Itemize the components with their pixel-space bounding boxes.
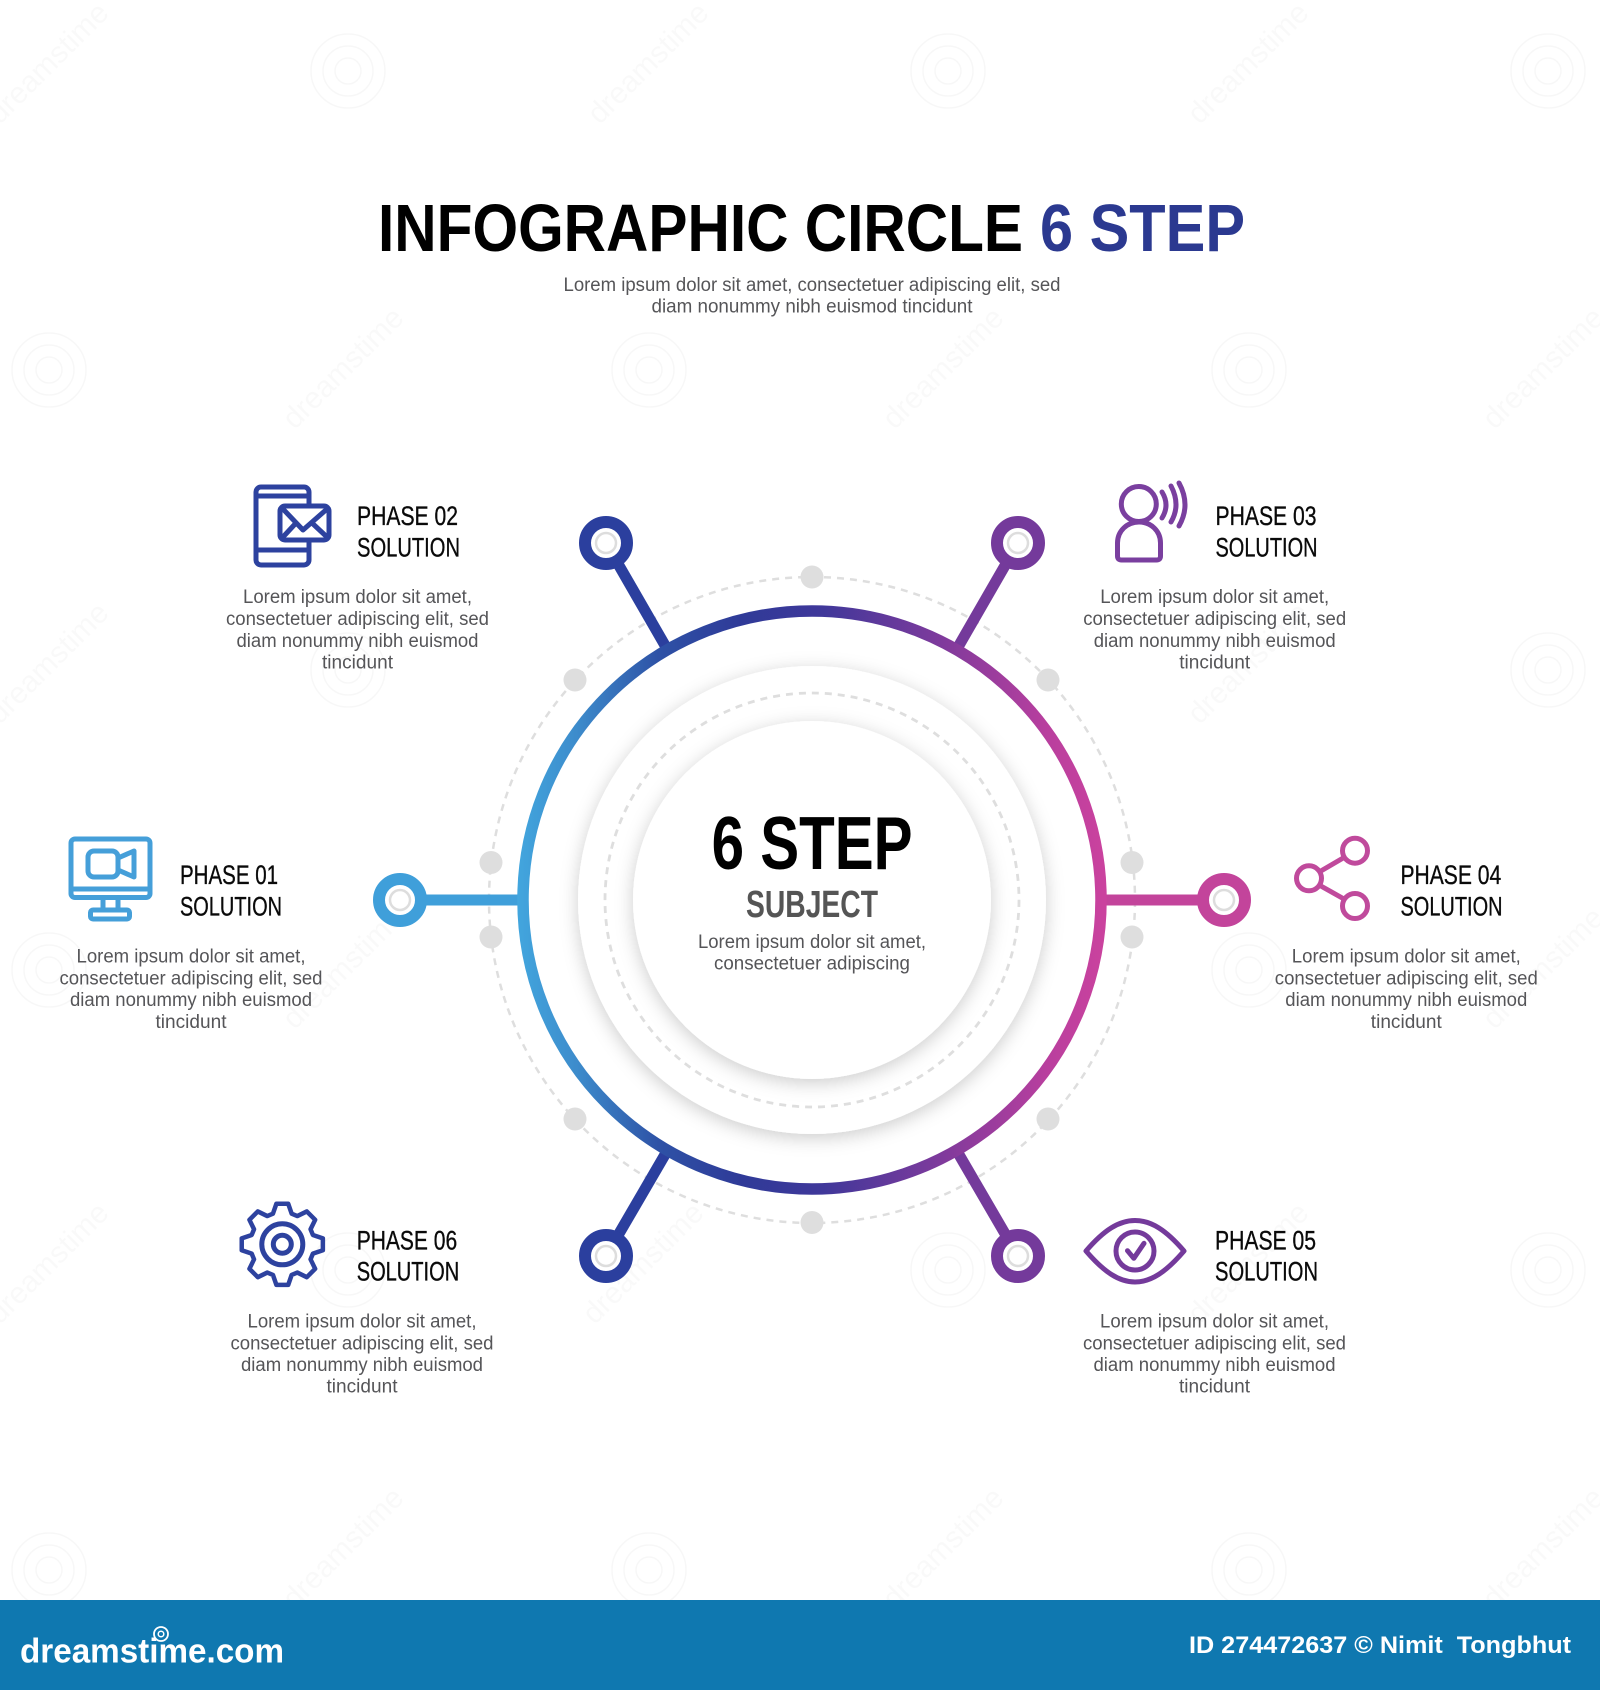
text: phase 03: [1083, 587, 1346, 674]
heading: phase 04: [1400, 860, 1502, 922]
connector node: phase 01: [379, 879, 523, 921]
footer credit: ID 274472637 © Nimit Tongbhut: [1189, 1632, 1571, 1659]
subtitle text: diam nonummy nibh euismod tincidunt: [652, 296, 973, 318]
heading: phase 05: SOLUTION: [1215, 1257, 1318, 1287]
text: phase 06: diam nonummy nibh euismod: [241, 1355, 483, 1376]
text: phase 05: diam nonummy nibh euismod: [1094, 1355, 1336, 1376]
heading: phase 05: PHASE 05: [1215, 1225, 1316, 1255]
footer banner: [0, 1600, 1600, 1690]
text: dreamstime: [876, 901, 1010, 1035]
text: dreamstime: [276, 1481, 410, 1615]
connector node: phase 03: [956, 522, 1039, 650]
text: phase 06: [230, 1312, 494, 1398]
text: phase 05: tincidunt: [1179, 1377, 1251, 1398]
title: 6 STEP: [1040, 191, 1245, 266]
center text: consectetuer adipiscing: [714, 954, 910, 974]
heading: phase 06: SOLUTION: [357, 1257, 459, 1287]
panel: phase 05: [1083, 1220, 1346, 1398]
heading: phase 03: SOLUTION: [1216, 532, 1318, 562]
text: phase 05: [1083, 1312, 1346, 1398]
icon: eye with check: [1086, 1220, 1184, 1282]
text: phase 05: Lorem ipsum dolor sit amet,: [1100, 1312, 1329, 1333]
text: phase 06: Lorem ipsum dolor sit amet,: [248, 1312, 476, 1333]
heading: phase 01: PHASE 01: [180, 860, 278, 890]
heading: phase 02: [357, 501, 460, 562]
text: phase 03: diam nonummy nibh euismod: [1094, 631, 1336, 652]
heading: phase 05: [1215, 1225, 1318, 1287]
icon: video monitor: [71, 839, 150, 919]
text: phase 04: tincidunt: [1371, 1012, 1443, 1033]
inner dashed ring: [605, 693, 1019, 1107]
heading: phase 02: PHASE 02: [357, 501, 458, 531]
panel: phase 06: [230, 1204, 494, 1398]
icon: gear: [242, 1204, 323, 1285]
connector node: phase 06: [585, 1150, 668, 1277]
text: phase 01: tincidunt: [156, 1012, 227, 1033]
center text: 6 STEP: [712, 801, 913, 885]
inner shadow disc: [633, 721, 991, 1079]
gradient main ring: [523, 611, 1101, 1189]
text: dreamstime: [1181, 1196, 1315, 1330]
text: dreamstime: [276, 901, 410, 1035]
text: phase 04: Lorem ipsum dolor sit amet,: [1292, 946, 1521, 968]
text: dreamstime: [1181, 596, 1315, 730]
text: phase 03: consectetuer adipiscing elit, sed: [1083, 609, 1346, 630]
icon: phone with envelope: [256, 487, 329, 565]
subtitle text: [564, 275, 1060, 318]
center text: Lorem ipsum dolor sit amet,: [698, 932, 926, 953]
text: phase 02: consectetuer adipiscing elit, sed: [226, 609, 489, 630]
center text: [698, 801, 926, 974]
outer dashed ring with dots: [480, 566, 1144, 1234]
heading: phase 06: PHASE 06: [357, 1225, 457, 1255]
text: phase 04: diam nonummy nibh euismod: [1285, 990, 1527, 1011]
text: dreamstime: [876, 301, 1010, 435]
text: phase 02: tincidunt: [322, 652, 394, 674]
heading: phase 03: [1216, 501, 1318, 562]
heading: phase 01: SOLUTION: [180, 892, 282, 922]
text: dreamstime: [581, 0, 715, 130]
panel: phase 03: [1083, 483, 1346, 674]
text: phase 01: [60, 946, 322, 1033]
text: phase 01: Lorem ipsum dolor sit amet,: [76, 946, 306, 968]
heading: phase 02: SOLUTION: [357, 532, 460, 562]
text: phase 04: consectetuer adipiscing elit, sed: [1275, 968, 1538, 990]
icon: share nodes: [1296, 838, 1368, 918]
text: phase 01: consectetuer adipiscing elit, sed: [60, 968, 322, 990]
text: phase 02: Lorem ipsum dolor sit amet,: [243, 587, 472, 608]
outer shadow disc: [578, 666, 1046, 1134]
heading: phase 04: PHASE 04: [1400, 860, 1501, 890]
panel: phase 04: [1275, 838, 1538, 1033]
connector node: phase 05: [956, 1150, 1039, 1277]
panel: phase 01: [60, 839, 322, 1033]
connector node: phase 02: [585, 522, 668, 650]
heading: phase 01: [180, 860, 282, 922]
text: dreamstime: [876, 1481, 1010, 1615]
connector node: phase 04: [1101, 879, 1245, 921]
center text: SUBJECT: [746, 884, 878, 926]
text: dreamstime: [276, 301, 410, 435]
subtitle text: Lorem ipsum dolor sit amet, consectetuer adipiscing elit, sed: [564, 275, 1060, 296]
text: dreamstime: [1181, 0, 1315, 130]
text: phase 02: [226, 587, 489, 674]
text: dreamstime: [576, 1196, 710, 1330]
panel: phase 02: [226, 487, 489, 674]
heading: phase 03: PHASE 03: [1216, 501, 1316, 531]
heading: phase 06: [357, 1225, 459, 1287]
text: phase 06: consectetuer adipiscing elit, sed: [230, 1333, 494, 1354]
heading: phase 04: SOLUTION: [1400, 892, 1502, 922]
text: phase 01: diam nonummy nibh euismod: [70, 990, 312, 1011]
title: INFOGRAPHIC CIRCLE: [378, 191, 1023, 266]
text: phase 04: [1275, 946, 1538, 1033]
text: phase 03: Lorem ipsum dolor sit amet,: [1100, 587, 1329, 608]
footer logo: dreamstime.com: [20, 1633, 284, 1671]
text: phase 06: tincidunt: [326, 1377, 398, 1398]
text: phase 05: consectetuer adipiscing elit, sed: [1083, 1333, 1346, 1354]
icon: person with sound waves: [1118, 483, 1185, 560]
text: phase 02: diam nonummy nibh euismod: [236, 631, 478, 652]
text: phase 03: tincidunt: [1179, 652, 1251, 674]
